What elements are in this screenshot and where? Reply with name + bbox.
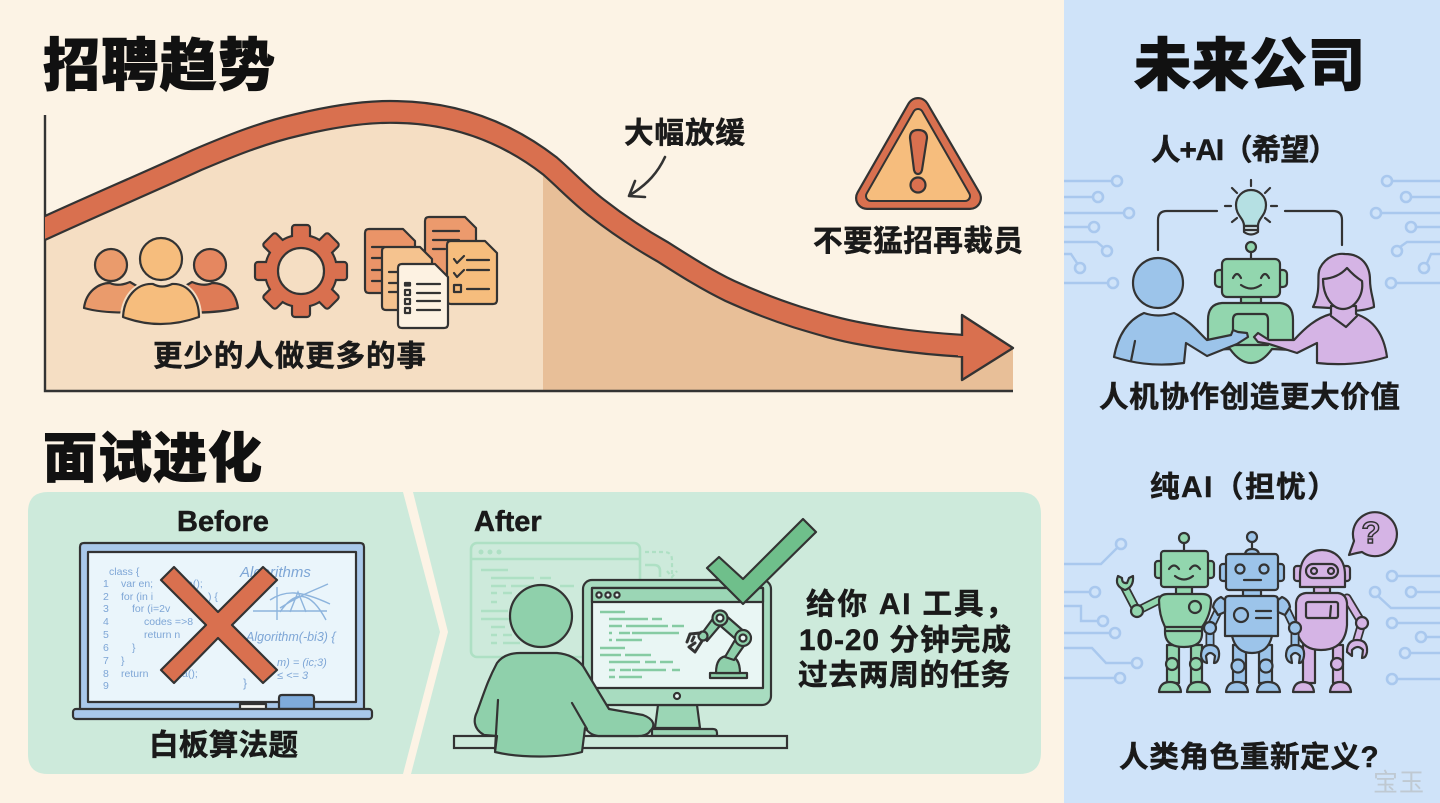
callout: sharp slowdown: 大幅放缓 <box>624 117 745 150</box>
robot helper <box>1208 242 1293 363</box>
title: future company: 未来公司 <box>1134 34 1365 98</box>
green robot <box>1117 533 1214 692</box>
heading: after: After <box>474 506 542 538</box>
handwritten code: return n <box>144 629 180 641</box>
illustration: human and AI collaboration <box>1114 242 1387 365</box>
handwritten code: return <box>121 668 149 680</box>
title: hiring trend: 招聘趋势 <box>43 34 275 98</box>
text: whiteboard algorithm question: 白板算法题 <box>149 729 298 762</box>
chart: hiring trend curve <box>20 112 1013 391</box>
handwritten code: for (in i <box>121 591 153 603</box>
heading: before: Before <box>177 506 269 538</box>
icon: team of people <box>84 238 238 324</box>
handwritten code: 9 <box>103 680 109 692</box>
handwritten code: ) { <box>208 591 218 603</box>
area under curve: slowdown phase <box>543 160 1013 391</box>
handwritten code: var en; <box>121 578 153 590</box>
text: AI tools compress two weeks to minutes: 过去两周的任务 <box>798 659 1010 692</box>
icon: question speech bubble <box>1349 512 1397 556</box>
handwritten code: 7 <box>103 655 109 667</box>
handwritten code: a(); <box>182 668 198 680</box>
illustration: whiteboard with algorithm code <box>73 543 372 719</box>
decoration: upper circuit lines <box>1064 176 1440 288</box>
handwritten code: 5 <box>103 629 109 641</box>
handwritten code: 3 <box>103 603 109 615</box>
handwritten code: class { <box>109 566 140 578</box>
panel: before <box>28 492 440 774</box>
icon: question speech bubble: ? <box>1362 515 1380 550</box>
handwritten code: } <box>132 642 136 654</box>
trend arrow <box>20 112 1013 380</box>
blue robot <box>1201 532 1304 692</box>
handwritten code: a(); <box>187 578 203 590</box>
heading: pure AI worry: 纯AI（担忧） <box>1150 471 1337 504</box>
handwritten code: m) = (ic;3) <box>277 657 327 669</box>
code lines on screen <box>600 612 684 677</box>
green check mark <box>707 519 816 604</box>
handwritten code: 8 <box>103 668 109 680</box>
text: no over-hiring then layoffs: 不要猛招再裁员 <box>813 225 1023 258</box>
handwritten code: codes =>8 <box>144 616 193 628</box>
text: AI tools compress two weeks to minutes <box>798 588 1015 692</box>
handwritten code: 6 <box>103 642 109 654</box>
red cross <box>161 567 277 683</box>
handwritten code: } <box>121 655 125 667</box>
woman <box>1254 254 1387 364</box>
text: human role redefined: 人类角色重新定义? <box>1119 741 1379 774</box>
whiteboard frame <box>73 543 372 719</box>
illustration: three robots <box>1117 532 1368 692</box>
text: human machine collaboration creates value: 人机协作创造更大价值 <box>1099 381 1400 414</box>
handwritten code: 2 <box>103 591 109 603</box>
handwritten code <box>103 564 337 692</box>
chart axes <box>45 115 1013 391</box>
text: AI tools compress two weeks to minutes: 10-20 分钟完成 <box>799 624 1011 657</box>
handwritten code: 4 <box>103 616 109 628</box>
desk <box>454 736 787 748</box>
panel: after <box>411 492 1041 774</box>
algorithm sketch chart <box>253 584 330 620</box>
monitor <box>583 580 771 736</box>
robot arm on screen <box>687 610 751 678</box>
watermark: 宝玉 <box>1373 763 1424 799</box>
handwritten code: Algorithm(-bi3) { <box>245 630 337 644</box>
heading: human plus AI hope: 人+AI（希望） <box>1151 134 1338 167</box>
arrow: slowdown pointer <box>629 157 665 197</box>
handwritten code: for (i=2v <box>132 603 171 615</box>
illustration: faded code window <box>471 543 677 657</box>
text: fewer people do more: 更少的人做更多的事 <box>153 340 426 373</box>
icon: warning triangle <box>867 109 970 198</box>
handwritten code: Algorithms <box>239 564 311 581</box>
icon: stack of documents <box>365 217 497 328</box>
handwritten code: } <box>243 676 247 690</box>
icon: gear <box>255 225 347 317</box>
handwritten code: ≤ <= 3 <box>277 670 309 682</box>
title: interview evolution: 面试进化 <box>43 429 262 489</box>
man <box>1114 258 1248 365</box>
purple robot <box>1293 550 1368 692</box>
handwritten code: 1 <box>103 578 109 590</box>
icon: light bulb with connectors <box>1158 180 1342 250</box>
person <box>475 585 653 756</box>
decoration: lower circuit lines <box>1064 539 1440 684</box>
illustration: person at monitor <box>454 519 816 756</box>
area under curve: early phase <box>45 112 543 391</box>
text: AI tools compress two weeks to minutes: 给你 AI 工具， <box>806 588 1015 621</box>
panel: future company background <box>1064 0 1440 803</box>
